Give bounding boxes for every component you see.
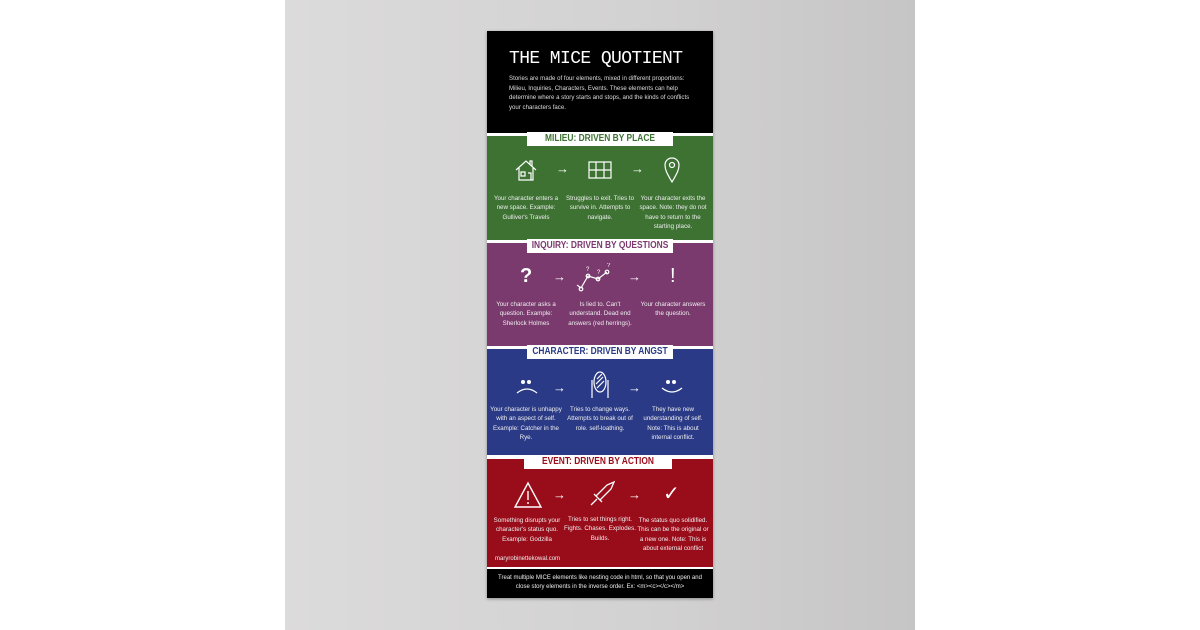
title: THE MICE QUOTIENT [509, 49, 682, 69]
footer text: Treat multiple MICE elements like nesting code in html, so that you open and close story elements in the inverse order. Ex: <m><c></c></m> [498, 575, 702, 590]
arrow: → [553, 380, 566, 395]
arrow: → [553, 487, 566, 502]
text: event 1: Something disrupts your character's status quo. Example: Godzilla [494, 517, 560, 543]
icon: map [588, 161, 612, 179]
arrow: → [628, 487, 641, 502]
panel: inquiry [487, 243, 713, 346]
heading: milieu [527, 132, 673, 146]
icon: pin [664, 157, 680, 183]
icon: mirror [591, 371, 609, 398]
panel: footer [487, 569, 713, 598]
icon: path [576, 263, 611, 292]
text: character 1: Your character is unhappy with an aspect of self. Example: Catcher in the Rye. [490, 406, 562, 441]
panel: milieu [487, 136, 713, 240]
text: inquiry 3: Your character answers the question. [641, 301, 705, 317]
icon: question: ? [520, 265, 532, 287]
text: milieu 1: Your character enters a new space. Example: Gulliver's Travels [494, 195, 558, 221]
text: milieu 3: Your character exits the space. Note: they do not have to return to the starting place. [639, 195, 707, 230]
arrow: → [553, 269, 566, 284]
icon: exclamation: ! [670, 265, 676, 287]
icon: path: ? [597, 270, 601, 276]
heading: event [524, 455, 672, 469]
text: character 3: They have new understanding of self. Note: This is about internal conflict. [643, 406, 703, 441]
heading: inquiry: INQUIRY: DRIVEN BY QUESTIONS [532, 240, 668, 251]
arrow: → [628, 380, 641, 395]
arrow: → [556, 161, 569, 176]
icon: sword [590, 480, 616, 506]
intro text: Stories are made of four elements, mixed in different proportions: Milieu, Inquiries, Characters, Events. These elements can help determine where a story starts and stops, and the kinds of conflicts your characters face. [509, 75, 689, 111]
arrow: → [628, 269, 641, 284]
heading: milieu: MILIEU: DRIVEN BY PLACE [545, 133, 655, 144]
icon: path: ? [607, 263, 611, 269]
panel: character [487, 349, 713, 455]
icon: path: ? [586, 267, 590, 273]
icon: warning [514, 482, 542, 508]
text: inquiry 1: Your character asks a question. Example: Sherlock Holmes [496, 301, 556, 327]
text: event 2: Tries to set things right. Fights. Chases. Explodes. Builds. [564, 516, 636, 542]
icon: happy face [662, 380, 682, 393]
credit: maryrobinettekowal.com [495, 556, 560, 562]
text: event 3: The status quo solidified. This can be the original or a new one. Note: This is about external conflict [637, 517, 709, 552]
text: inquiry 2: Is lied to. Can't understand. Dead end answers (red herrings). [568, 301, 632, 327]
icon: sad face [516, 380, 538, 394]
heading: character: CHARACTER: DRIVEN BY ANGST [532, 346, 668, 357]
arrow: → [631, 161, 644, 176]
icon: house [516, 160, 536, 181]
panel: event [487, 459, 713, 567]
heading: event: EVENT: DRIVEN BY ACTION [542, 456, 654, 467]
text: character 2: Tries to change ways. Attempts to break out of role. self-loathing. [567, 406, 633, 432]
poster [487, 31, 713, 598]
text: milieu 2: Struggles to exit. Tries to survive in. Attempts to navigate. [566, 195, 634, 221]
icon: check: ✓ [663, 483, 680, 505]
panel: header [487, 31, 713, 133]
